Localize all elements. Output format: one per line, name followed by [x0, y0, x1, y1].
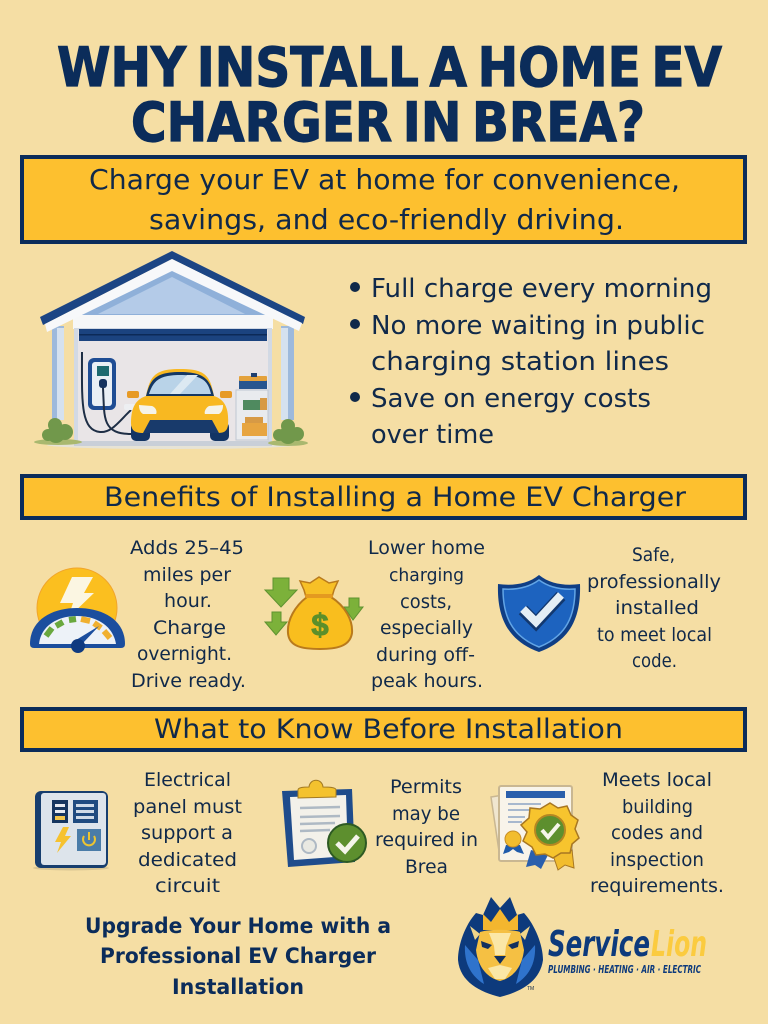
- section heading: before installation: What to Know Before Installation: [154, 714, 623, 745]
- text: charging speed: [130, 537, 246, 692]
- text: electrical panel: panel must: [133, 796, 242, 818]
- text: permits: Permits: [390, 776, 462, 798]
- call to action: [85, 914, 391, 999]
- text: charging speed: Charge: [153, 617, 226, 639]
- text: charging speed: Drive ready.: [131, 670, 246, 692]
- section heading: before installation: [22, 709, 745, 750]
- text: safe install: professionally: [587, 571, 721, 593]
- text: codes: Meets local: [602, 769, 712, 791]
- text: electrical panel: support a: [141, 822, 233, 844]
- text: safe install: installed: [615, 597, 699, 619]
- text: lower costs: charging: [389, 565, 464, 586]
- call to action: Professional EV Charger: [100, 944, 377, 968]
- icon: certificate with seal: [491, 786, 579, 870]
- text: lower costs: Lower home: [368, 537, 485, 559]
- bullet list: Full charge every morning: [371, 274, 712, 304]
- logo: wordmark: Lion: [651, 924, 707, 965]
- icon: shield with check: [498, 575, 580, 652]
- logo: lion emblem: TM: [527, 986, 534, 992]
- yellow car: [127, 369, 232, 441]
- text: permits: may be: [392, 803, 460, 825]
- logo: lion emblem: [458, 897, 543, 997]
- icon: money bag with down arrows: [265, 577, 363, 649]
- icon: speed gauge with lightning: [30, 568, 125, 653]
- text: permits: Brea: [405, 856, 448, 878]
- text: codes: inspection: [610, 849, 704, 871]
- logo: wordmark: Service: [548, 924, 650, 965]
- text: permits: [375, 776, 478, 878]
- call to action: Upgrade Your Home with a: [85, 914, 391, 938]
- text: electrical panel: [133, 769, 242, 897]
- text: lower costs: peak hours.: [371, 670, 483, 692]
- section heading: benefits: Benefits of Installing a Home EV Charger: [104, 482, 687, 513]
- shrubs: [34, 418, 308, 446]
- logo: ServiceLion: [458, 897, 707, 997]
- text: charging speed: hour.: [164, 590, 212, 612]
- text: lower costs: during off-: [376, 644, 475, 666]
- intro banner: savings, and eco-friendly driving.: [149, 203, 624, 236]
- text: safe install: Safe,: [632, 544, 675, 566]
- bullet list: Save on energy costs: [371, 384, 651, 414]
- intro banner: [22, 157, 745, 242]
- text: codes: building: [622, 796, 693, 818]
- intro banner: Charge your EV at home for convenience,: [89, 163, 680, 196]
- icon: clipboard with check: [282, 780, 366, 867]
- text: lower costs: costs,: [400, 591, 452, 613]
- title: [57, 36, 722, 154]
- wall charger: [82, 352, 137, 434]
- text: electrical panel: circuit: [155, 875, 220, 897]
- text: codes: [590, 769, 724, 897]
- icon: money bag with down arrows: $: [311, 607, 329, 642]
- text: lower costs: especially: [380, 617, 473, 639]
- text: charging speed: Adds 25–45: [130, 537, 244, 559]
- text: safe install: to meet local: [597, 624, 712, 646]
- call to action: Installation: [172, 975, 304, 999]
- garage shelf: [236, 373, 268, 440]
- text: safe install: [587, 544, 721, 672]
- illustration: garage with EV charging: [34, 251, 308, 449]
- title: CHARGER IN BREA?: [131, 91, 645, 154]
- section heading: benefits: [22, 476, 745, 518]
- text: lower costs: [368, 537, 485, 692]
- bullet list: No more waiting in public: [371, 311, 705, 341]
- text: safe install: code.: [632, 650, 677, 672]
- text: codes: codes and: [611, 822, 703, 844]
- bullet list: [350, 274, 712, 450]
- text: codes: requirements.: [590, 875, 724, 897]
- bullet list: over time: [371, 420, 494, 450]
- roof: [40, 251, 305, 332]
- text: charging speed: overnight.: [137, 643, 232, 665]
- bullet list: charging station lines: [371, 347, 669, 377]
- icon: electrical panel: [33, 791, 109, 870]
- logo: wordmark: PLUMBING · HEATING · AIR · ELECTRIC: [548, 964, 701, 976]
- text: electrical panel: dedicated: [138, 849, 237, 871]
- text: electrical panel: Electrical: [144, 769, 231, 791]
- text: charging speed: miles per: [143, 564, 231, 586]
- text: permits: required in: [375, 829, 478, 851]
